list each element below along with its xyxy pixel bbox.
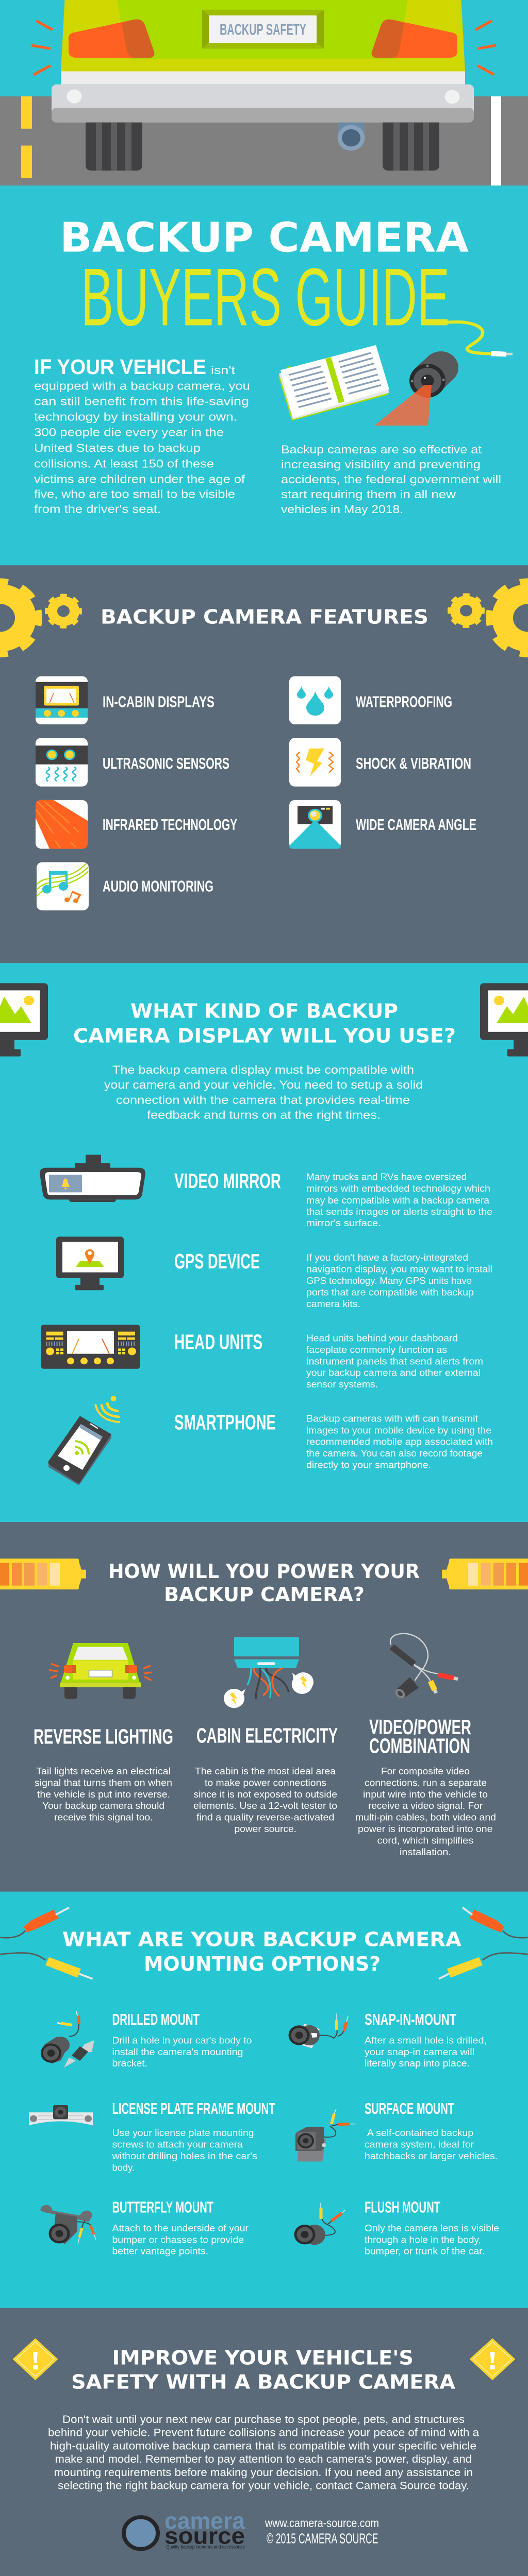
icon: car rear [31,0,496,171]
text block: intro right: vehicles in May 2018. [281,503,403,516]
power option: video/power combination: connections, run a separate [365,1777,487,1788]
icon: video power cable [390,1634,458,1700]
logo: camera source: source [164,2523,245,2549]
mount: surface: A self-contained backup [367,2128,473,2139]
icon: monitor right [480,983,528,1057]
feature: shock and vibration: SHOCK & VIBRATION [356,754,471,772]
heading: mounting: MOUNTING OPTIONS? [144,1953,381,1976]
text block: video mirror: that sends images or alerts straight to the [306,1206,492,1217]
power option: cabin electricity: to make power connections [205,1777,326,1788]
heading: power: HOW WILL YOU POWER YOUR [108,1560,420,1583]
text block: display intro: your camera and your vehicle. You need to setup a solid [104,1078,423,1091]
heading: mounting: WHAT ARE YOUR BACKUP CAMERA [62,1928,461,1951]
mount: snap-in: SNAP-IN-MOUNT [365,2010,456,2028]
icon: gears left [0,582,80,653]
mount: flush [365,2198,499,2257]
icon: rca connectors left [0,1908,93,1979]
power option: video/power combination: input wire into the vehicle to [363,1789,488,1800]
mount: license plate frame: without drilling holes in the car's [111,2150,257,2162]
text block: display intro: feedback and turns on at the right times. [147,1108,381,1121]
heading: power [108,1560,420,1606]
icon: head unit [41,1325,140,1369]
mount: flush: Only the camera lens is visible [365,2223,499,2234]
feature: audio monitoring [37,862,213,910]
power option: video/power combination [355,1715,496,1858]
feature: shock and vibration [289,738,471,787]
mount: license plate frame: LICENSE PLATE FRAME MOUNT [112,2099,275,2117]
label: smartphone: SMARTPHONE [174,1411,276,1434]
text block: display intro: The backup camera display must be compatible with [112,1063,414,1076]
power option: reverse lighting: Your backup camera should [42,1801,164,1811]
heading: conclusion: SAFETY WITH A BACKUP CAMERA [71,2371,455,2394]
title [60,214,469,343]
text block: display intro [104,1063,423,1121]
power option: cabin electricity: elements. Use a 12-volt tester to [193,1801,337,1811]
text block: conclusion: behind your vehicle. Prevent future collisions and increase your peace of mind with a [48,2426,480,2439]
icon: guide book [278,345,389,421]
mount: surface [365,2099,498,2162]
mount: surface: camera system, ideal for [365,2139,474,2150]
mount: snap-in: literally snap into place. [365,2058,470,2069]
mount: butterfly [112,2198,249,2257]
label: video mirror: VIDEO MIRROR [174,1169,281,1193]
power option: video/power combination: COMBINATION [369,1734,470,1758]
feature: waterproofing: WATERPROOFING [356,692,452,710]
text block: smartphone: the camera. You can also record footage [306,1448,483,1459]
text block: intro right: start requiring them in all new [281,488,456,501]
power option: reverse lighting: signal that turns them on when [35,1777,172,1788]
mount: license plate frame [111,2099,275,2173]
icon: monitor left [0,983,48,1057]
icon: warning sign right [470,2339,515,2380]
text block: conclusion: high-quality automotive backup camera that is compatible with your specific vehicle [50,2439,476,2452]
heading: mounting [62,1928,461,1976]
panel: hero car background [0,0,528,565]
text block: intro left: equipped with a backup camera, you [34,379,250,392]
power option: video/power combination: installation. [400,1847,451,1858]
icon: rca connectors right [439,1908,528,1979]
footer: website and copyright: © 2015 CAMERA SOURCE [267,2531,378,2547]
power option: reverse lighting [34,1725,173,1823]
power option: video/power combination: cord, which simplifies [377,1835,473,1846]
mount: flush: bumper, or trunk of the car. [365,2246,485,2257]
icon: snap-in mount camera [289,2013,348,2048]
text block: intro right: accidents, the federal government will [281,473,501,486]
mount: snap-in: After a small hole is drilled, [365,2035,487,2046]
mount: drilled [112,2010,252,2069]
power option: video/power combination: For composite video [381,1766,470,1777]
mount: surface: hatchbacks or larger vehicles. [365,2150,498,2162]
text block: gps device: GPS technology. Many GPS units have [306,1276,472,1286]
power option: reverse lighting: the vehicle is put into reverse. [37,1789,170,1800]
text block: intro left: 300 people die every year in the [34,426,224,438]
text block: smartphone: Backup cameras with wifi can transmit [306,1413,478,1424]
text block: intro right [281,443,501,516]
text block: display intro: connection with the camera that provides real-time [116,1093,410,1106]
panel: backup camera features [0,565,528,963]
power option: video/power combination: power is incorporated into one [358,1824,492,1835]
text block: intro left: collisions. At least 150 of these [34,457,214,470]
footer: website and copyright: www.camera-source.com [265,2517,379,2530]
text block: gps device [306,1252,492,1310]
panel: display options [0,963,528,1522]
feature: wide camera angle [289,800,476,849]
icon: cabin wiring [224,1637,314,1708]
text block: conclusion: mounting requirements before making your decision. If you need any assistance in [54,2466,473,2479]
icon: light rays [31,21,496,75]
text block: intro left: isn't [211,364,236,377]
icon: flush mount camera [294,2203,345,2245]
label: gps device: GPS DEVICE [174,1249,260,1274]
icon: small car reverse lights [49,1643,152,1699]
panel: conclusion [0,2308,528,2576]
text block: head units: sensor systems. [306,1379,378,1390]
icon: right tail light [372,20,457,58]
mount: surface: SURFACE MOUNT [365,2099,454,2117]
feature: infrared technology [36,800,237,849]
power option: cabin electricity [193,1724,338,1835]
text block: conclusion [48,2413,480,2492]
icon: mounted camera under bumper [337,123,365,150]
text block: conclusion: Don't wait until your next new car purchase to spot people, pets, and structures [62,2413,465,2426]
text block: intro right: Backup cameras are so effective at [281,443,482,456]
mount: butterfly: better vantage points. [112,2246,208,2257]
power option: cabin electricity: The cabin is the most ideal area [195,1766,336,1777]
text block: conclusion: selecting the right backup camera for your vehicle, contact Camera Source today. [58,2479,469,2492]
title: BACKUP CAMERA [60,214,469,262]
heading: conclusion: IMPROVE YOUR VEHICLE'S [112,2347,414,2369]
text block: intro right: increasing visibility and preventing [281,458,481,471]
text block: gps device: camera kits. [306,1299,360,1310]
power option: reverse lighting: Tail lights receive an electrical [36,1766,171,1777]
footer: website and copyright [265,2517,379,2547]
text block: intro left [34,355,250,515]
heading: display: WHAT KIND OF BACKUP [130,1000,398,1023]
power option: video/power combination: VIDEO/POWER [369,1715,471,1739]
mount: snap-in [365,2010,487,2069]
power option: video/power combination: receive a video signal. For [368,1801,483,1811]
text block: head units [306,1333,483,1390]
icon: title cable [427,322,513,357]
text block: smartphone: directly to your smartphone. [306,1460,431,1470]
license plate text: BACKUP SAFETY [220,20,306,38]
heading: display: CAMERA DISPLAY WILL YOU USE? [73,1025,456,1047]
text block: gps device: navigation display, you may want to install [306,1264,492,1275]
icon: warning sign left [13,2339,57,2380]
mount: drilled: Drill a hole in your car's body to [112,2035,252,2046]
mount: flush: through a hole in the body, [365,2234,481,2245]
icon: butterfly mount camera [40,2205,96,2244]
feature: audio monitoring: AUDIO MONITORING [103,877,213,895]
text block: gps device: If you don't have a factory-integrated [306,1252,468,1263]
power option: reverse lighting: REVERSE LIGHTING [34,1725,173,1749]
icon: drilled mount camera [41,2011,94,2067]
mount: butterfly: BUTTERFLY MOUNT [112,2198,213,2216]
text block: video mirror: may be compatible with a backup camera [306,1195,489,1206]
text block: intro left: United States due to backup [34,442,201,454]
text block: conclusion: make and model. Remember to pay attention to each camera's power, display, and [55,2453,472,2465]
feature: ultrasonic sensors: ULTRASONIC SENSORS [103,754,229,772]
icon: gps device [56,1236,124,1290]
icon: gears right [450,582,528,653]
power option: reverse lighting: receive this signal too. [54,1812,153,1823]
text block: head units: faceplate commonly function as [306,1344,447,1355]
logo: camera source [124,2508,245,2550]
icon: backup camera with beam [374,351,458,426]
text block: intro left: from the driver's seat. [34,502,161,515]
text block: video mirror: mirrors with embedded technology which [306,1183,490,1194]
text block: gps device: ports that are compatible with backup [306,1287,474,1298]
power option: video/power combination: multi-pin cables, both video and [355,1812,496,1823]
mount: license plate frame: body. [112,2162,135,2173]
text block: smartphone: images to your mobile device by using the [306,1425,491,1436]
text block: intro left: IF YOUR VEHICLE [34,355,206,379]
text block: head units: your backup camera and other external [306,1367,481,1379]
text block: video mirror: Many trucks and RVs have oversized [306,1172,467,1182]
icon: battery right [442,1558,528,1589]
icon: license plate mount camera [29,2105,93,2125]
text block: intro left: can still benefit from this life-saving [34,395,249,408]
power option: cabin electricity: CABIN ELECTRICITY [196,1724,338,1748]
text block: video mirror [306,1172,492,1229]
feature: infrared technology: INFRARED TECHNOLOGY [103,816,237,834]
mount: drilled: install the camera's mounting [112,2046,243,2058]
mount: flush: FLUSH MOUNT [365,2198,440,2216]
mount: drilled: bracket. [112,2058,147,2069]
feature: in-cabin displays [36,676,214,724]
text block: smartphone: recommended mobile app associated with [306,1436,493,1447]
mount: butterfly: Attach to the underside of your [112,2223,249,2234]
icon: surface mount camera [295,2109,355,2162]
feature: in-cabin displays: IN-CABIN DISPLAYS [103,692,214,710]
text block: head units: instrument panels that send alerts from [306,1356,483,1367]
mount: license plate frame: Use your license plate mounting [112,2128,254,2139]
icon: left tail light [69,20,154,58]
power option: cabin electricity: find a quality reverse-activated [196,1812,334,1823]
heading: power: BACKUP CAMERA? [164,1583,365,1606]
heading: features: BACKUP CAMERA FEATURES [101,606,428,629]
mount: snap-in: your snap-in camera will [365,2046,474,2058]
label: head units: HEAD UNITS [174,1330,262,1354]
mount: license plate frame: screws to attach your camera [112,2139,243,2150]
text block: intro left: five, who are too small to be visible [34,487,235,500]
text block: smartphone [306,1413,493,1470]
power option: cabin electricity: since it is not exposed to outside [194,1789,337,1800]
icon: battery left [0,1558,86,1589]
mount: butterfly: bumper or chasses to provide [112,2234,244,2245]
text block: video mirror: mirror's surface. [306,1218,381,1229]
logo: camera source: Quality backup cameras and accessories [166,2545,245,2550]
feature: waterproofing [289,676,452,724]
feature: ultrasonic sensors [36,738,229,787]
heading: conclusion [71,2347,455,2394]
icon: video mirror [40,1155,145,1202]
power option: cabin electricity: power source. [234,1824,296,1835]
heading: display [73,1000,456,1047]
mount: drilled: DRILLED MOUNT [112,2010,200,2028]
text block: intro left: victims are children under the age of [34,472,245,485]
text block: intro left: technology by installing your own. [34,410,237,423]
icon: smartphone [48,1396,120,1485]
text block: head units: Head units behind your dashboard [306,1333,458,1344]
panel: mounting options [0,1892,528,2308]
panel: power options [0,1522,528,1892]
logo: camera source: camera [164,2508,245,2534]
